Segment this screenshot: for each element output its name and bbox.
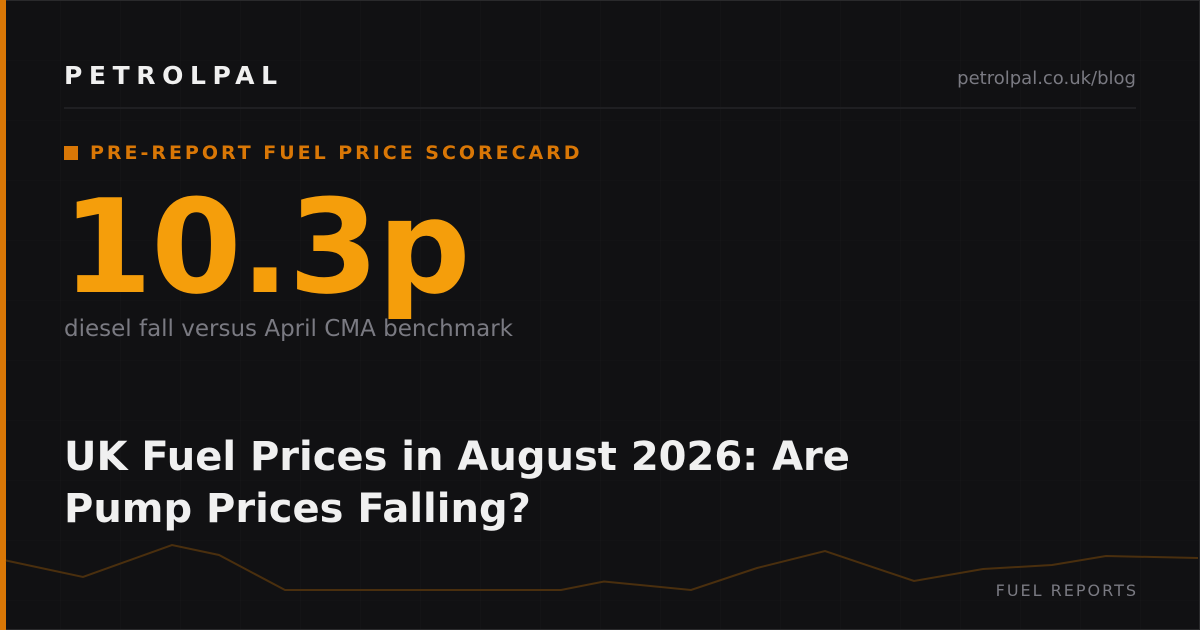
headline number: 10.3p bbox=[62, 171, 469, 323]
header divider bbox=[64, 107, 1136, 109]
section tag: FUEL REPORTS bbox=[996, 581, 1138, 600]
article title bbox=[64, 434, 850, 532]
headline caption: diesel fall versus April CMA benchmark bbox=[64, 316, 513, 342]
eyebrow label: PRE-REPORT FUEL PRICE SCORECARD bbox=[90, 142, 583, 164]
eyebrow marker bbox=[64, 146, 78, 160]
article title: Pump Prices Falling? bbox=[64, 486, 531, 532]
article title: UK Fuel Prices in August 2026: Are bbox=[64, 434, 850, 480]
accent bar bbox=[0, 0, 6, 630]
brand wordmark: PETROLPAL bbox=[64, 61, 284, 90]
blog url: petrolpal.co.uk/blog bbox=[957, 68, 1136, 89]
